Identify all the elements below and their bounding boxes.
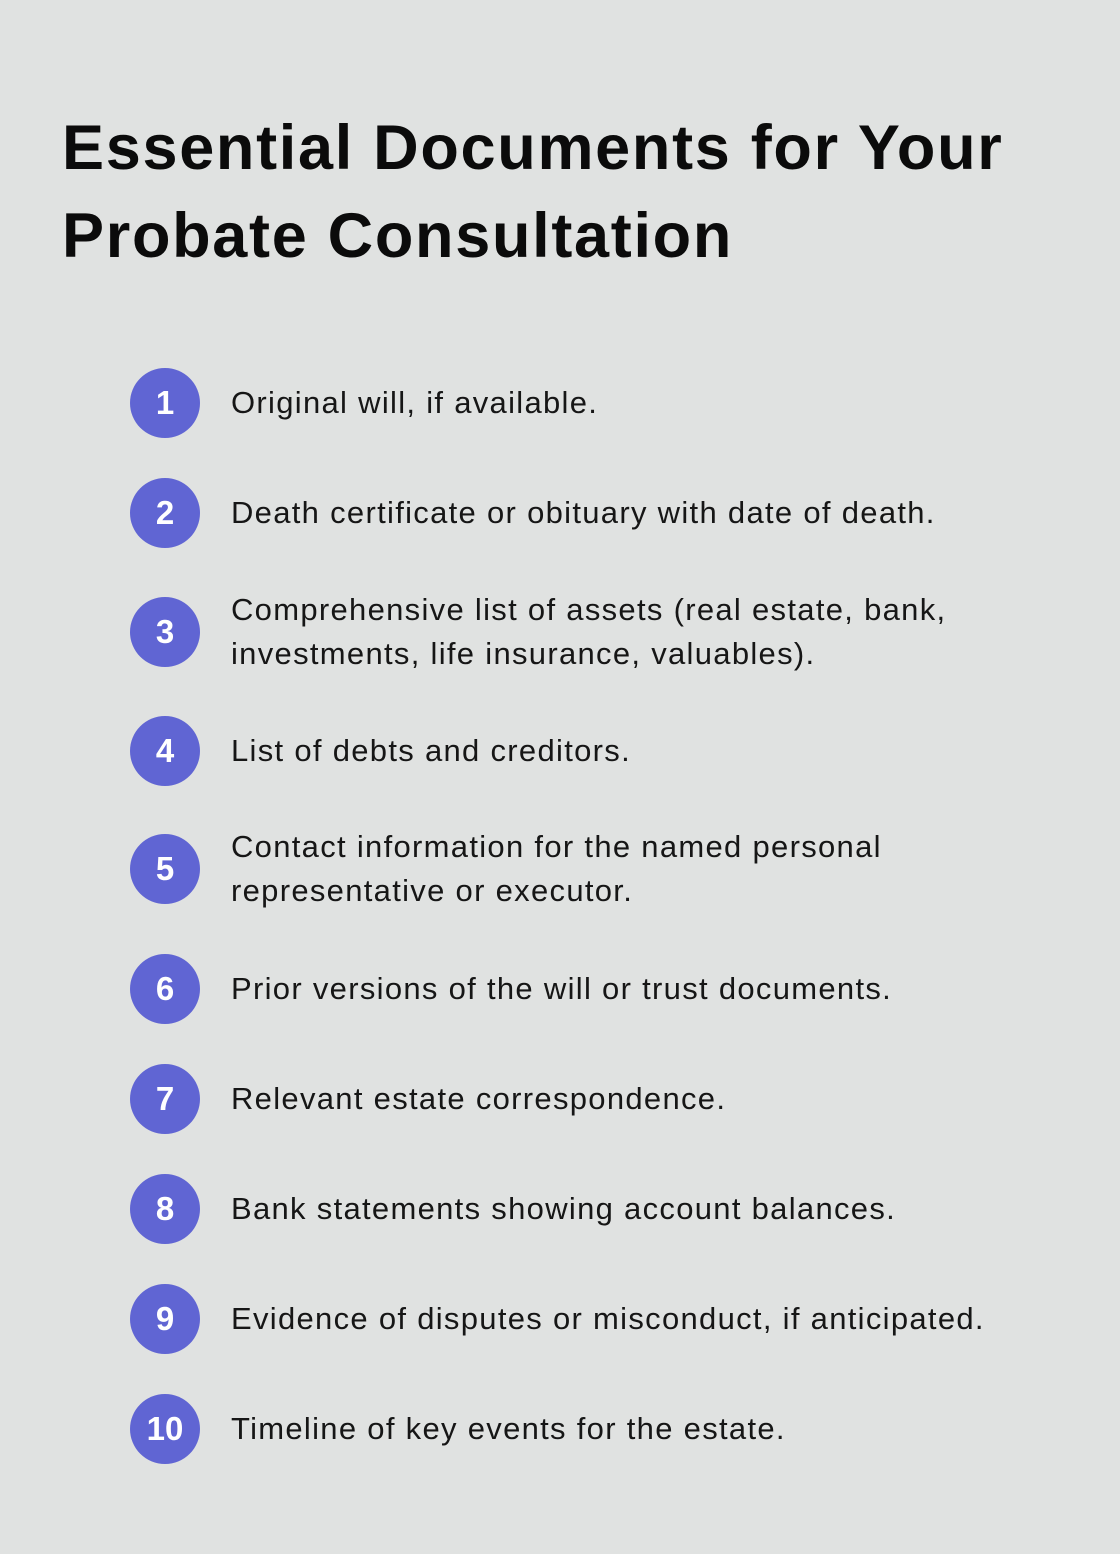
item 10: Timeline of key events for the estate. (231, 1411, 786, 1446)
item 2 (130, 478, 936, 548)
item 9: Evidence of disputes or misconduct, if anticipated. (231, 1301, 985, 1336)
item 4: 4 (156, 732, 174, 769)
title (62, 113, 1003, 271)
title: Probate Consultation (62, 201, 733, 271)
item 5: Contact information for the named personal (231, 829, 882, 864)
item 5: representative or executor. (231, 873, 633, 908)
item 8: Bank statements showing account balances. (231, 1191, 896, 1226)
item 7 (130, 1064, 726, 1134)
item 1 (130, 368, 598, 438)
item 9 (130, 1284, 985, 1354)
item 5: 5 (156, 850, 174, 887)
item 8 (130, 1174, 896, 1244)
item 1: Original will, if available. (231, 385, 598, 420)
item 4 (130, 716, 631, 786)
item 6: 6 (156, 970, 174, 1007)
item 10 (130, 1394, 786, 1464)
item 7: 7 (156, 1080, 174, 1117)
item 8: 8 (156, 1190, 174, 1227)
item 3: 3 (156, 613, 174, 650)
item 1: 1 (156, 384, 174, 421)
item 3 (130, 592, 946, 671)
item 4: List of debts and creditors. (231, 733, 631, 768)
item 3: Comprehensive list of assets (real estate, bank, (231, 592, 946, 627)
item 9: 9 (156, 1300, 174, 1337)
item 7: Relevant estate correspondence. (231, 1081, 726, 1116)
item 5 (130, 829, 882, 908)
item 2: 2 (156, 494, 174, 531)
item 10: 10 (147, 1410, 183, 1447)
item 6: Prior versions of the will or trust documents. (231, 971, 892, 1006)
title: Essential Documents for Your (62, 113, 1003, 183)
item 6 (130, 954, 892, 1024)
item 3: investments, life insurance, valuables). (231, 636, 815, 671)
item 2: Death certificate or obituary with date of death. (231, 495, 936, 530)
